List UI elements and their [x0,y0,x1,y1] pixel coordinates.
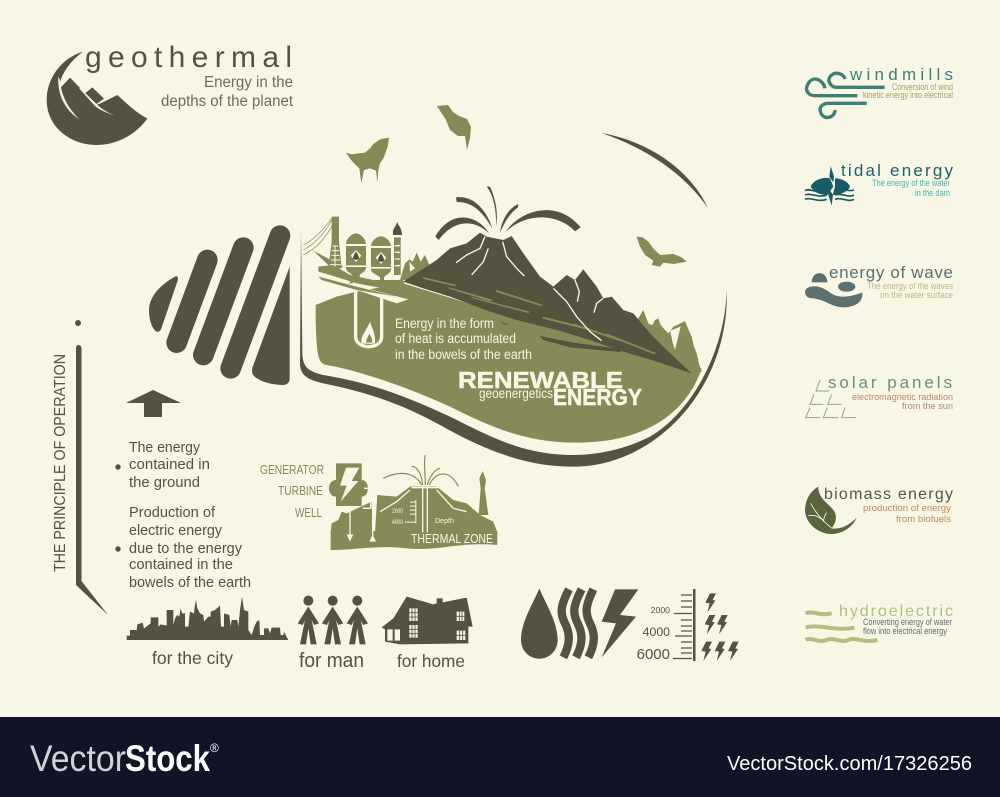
principle of operation bracket [52,320,108,615]
panel: solar panels [806,373,953,418]
text: operation bullets: electric energy [129,522,222,539]
panel: energy of wave: The energy of the waves [867,281,953,291]
panel: energy of wave [805,263,953,307]
panel: solar panels: from the sun [902,401,953,411]
panel: energy of wave: on the water surface [880,290,953,300]
panel: hydroelectric: hydroelectric [839,603,953,620]
text: operation bullets [115,439,251,591]
lava arcs [435,217,489,240]
text: operation bullets: contained in [129,456,210,473]
text: operation bullets: due to the energy [129,540,242,557]
text: operation bullets: Production of [129,504,216,521]
panel: windmills [807,65,953,118]
flare stack [394,237,401,275]
panel: biomass energy [805,486,953,534]
panel: renewable energy bulb landscape [300,187,727,467]
title: renewable energy: geoenergetics [479,386,553,401]
tanks [346,233,366,283]
chart: depth scale [637,589,696,663]
text: thermal zone labels: 4000 [392,520,404,526]
panel: biomass energy: from biofuels [896,514,951,525]
text: thermal zone labels [392,509,493,546]
arc: top right bulb outline [602,133,708,208]
text: operation bullets: the ground [129,474,200,491]
labels: generator turbine well [260,462,324,520]
labels: generator turbine well: GENERATOR [260,462,324,477]
text: for man: for man [299,650,364,672]
panel: hydroelectric: flow into electrical energy [863,626,947,636]
title: renewable energy [458,367,642,410]
panel: energy of wave: energy of wave [829,263,953,282]
panel: biomass energy: biomass energy [824,486,953,503]
text: thermal zone labels: 2000 [392,509,404,515]
green ground [316,283,702,443]
title: geothermal: Energy in the [204,74,293,91]
panel: hydroelectric: Converting energy of water [863,617,952,627]
diagram: thermal zone [329,455,497,550]
logo: geothermal crescent [47,52,147,145]
panel: windmills: windmills [849,65,953,84]
title: renewable energy: RENEWABLE [458,367,623,393]
panel: tidal energy: The energy of the water [872,178,950,188]
text: energy in the form of heat: Energy in the form [395,316,494,331]
panel: windmills: kinetic energy into electrical [863,90,953,100]
title: geothermal: depths of the planet [161,93,294,110]
white scratches [317,273,408,303]
panel: tidal energy [805,161,954,206]
panel: windmills: Conversion of wind [892,82,953,92]
title: geothermal: geothermal [85,41,292,74]
title: renewable energy: ENERGY [553,384,642,410]
title: geothermal [85,41,294,110]
icon: up arrow [126,390,181,417]
panel: tidal energy: in the dam [915,188,950,198]
text: for the city: for the city [152,648,233,668]
flame [361,322,375,344]
text: energy in the form of heat [395,316,532,362]
icon: depth lightning bolts [701,593,739,661]
chart: depth scale: 6000 [637,646,670,663]
U tube [356,290,382,347]
derrick [313,217,343,270]
text: energy in the form of heat: of heat is accumulated [395,331,516,346]
text: operation bullets: bowels of the earth [129,574,251,591]
panel: hydroelectric [806,603,953,641]
principle of operation bracket: THE PRINCIPLE OF OPERATION [52,354,69,572]
panel: solar panels: solar panels [828,373,952,392]
lava cracks [456,237,603,341]
panel: biomass energy: production of energy [863,503,951,514]
platform [318,265,405,288]
icon: three people [298,596,368,644]
labels: generator turbine well: TURBINE [278,483,323,498]
footer: watermark bar: VectorStock.com/17326256 [727,753,972,775]
panel: solar panels: electromagnetic radiation [852,392,953,402]
text: thermal zone labels: THERMAL ZONE [411,532,493,546]
icon: bird left [346,138,389,183]
bulb outline [300,228,727,467]
footer: watermark bar [0,717,1000,797]
icon: city skyline [127,597,288,640]
text: for home: for home [397,651,465,671]
footer: watermark bar: Stock [125,738,210,779]
text: operation bullets: The energy [129,439,200,456]
chart: depth scale: 4000 [643,625,670,639]
trees right [630,310,702,377]
text: thermal zone labels: Depth [435,518,454,525]
trees behind volcano [400,253,430,280]
icon: light bulb stripes [149,236,290,385]
icon: bird right [637,237,687,267]
footer: watermark bar: Vector [30,738,126,779]
icon: drop, waves and bolt [521,588,638,659]
chart: depth scale: 2000 [651,605,670,615]
power lines [303,218,333,255]
text: operation bullets: contained in the [129,556,233,573]
mountains [403,233,692,373]
labels: generator turbine well: WELL [295,505,322,520]
footer: watermark bar: ® [210,741,219,755]
icon: bird top [437,105,471,150]
panel: tidal energy: tidal energy [841,161,954,180]
icon: house [382,597,473,644]
text: energy in the form of heat: in the bowels of the earth [395,347,532,362]
